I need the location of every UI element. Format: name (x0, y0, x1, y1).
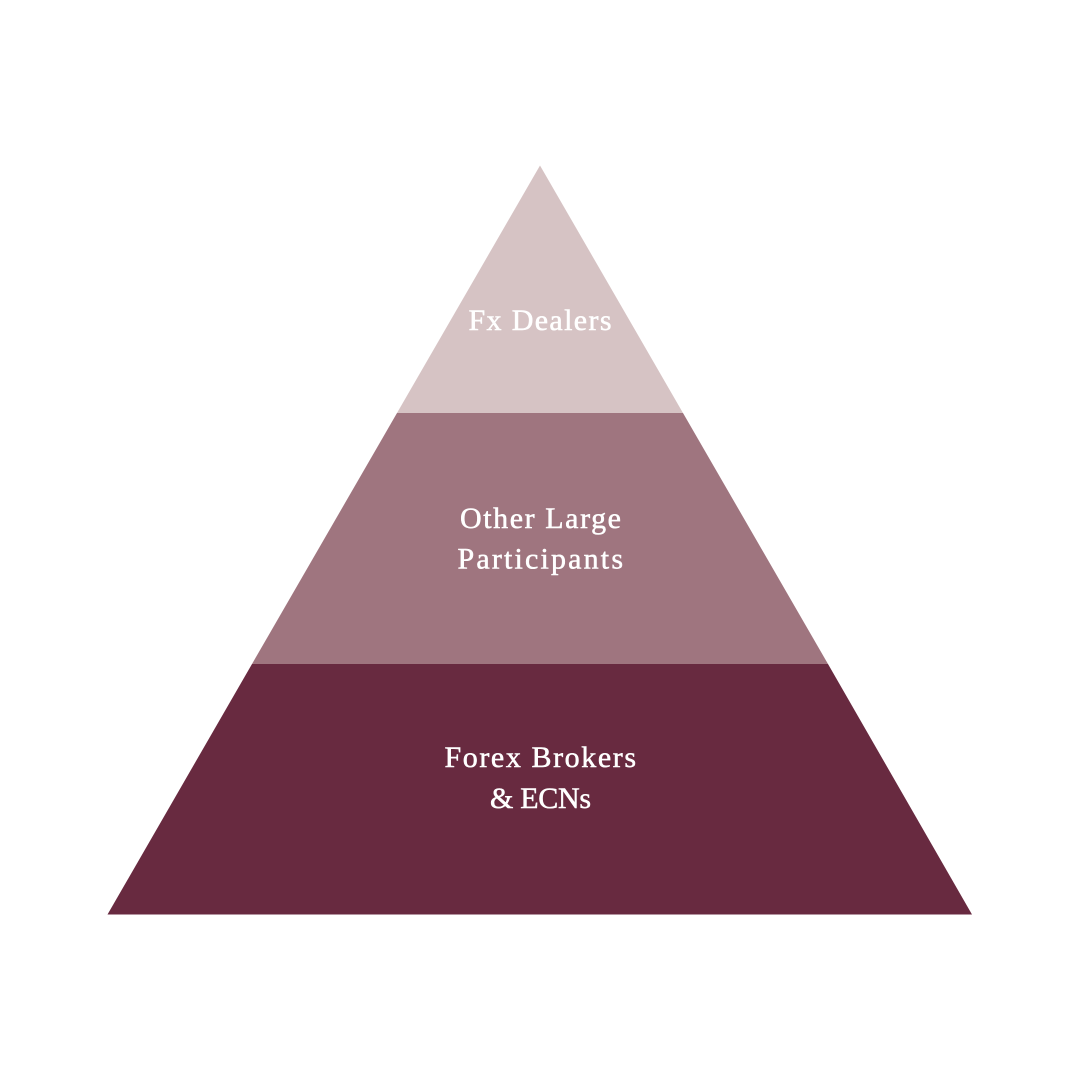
tier: Fx Dealers (397, 166, 683, 413)
tier: Forex Brokers & ECNs: & ECNs (490, 782, 591, 815)
tier: Forex Brokers & ECNs (108, 664, 972, 914)
tier: Other Large Participants: Other Large (460, 502, 621, 535)
tier: Other Large Participants (252, 413, 828, 664)
tier: Other Large Participants: Participants (458, 542, 623, 576)
tier: Forex Brokers & ECNs: Forex Brokers (444, 741, 636, 774)
tier: Fx Dealers: Fx Dealers (468, 304, 612, 337)
